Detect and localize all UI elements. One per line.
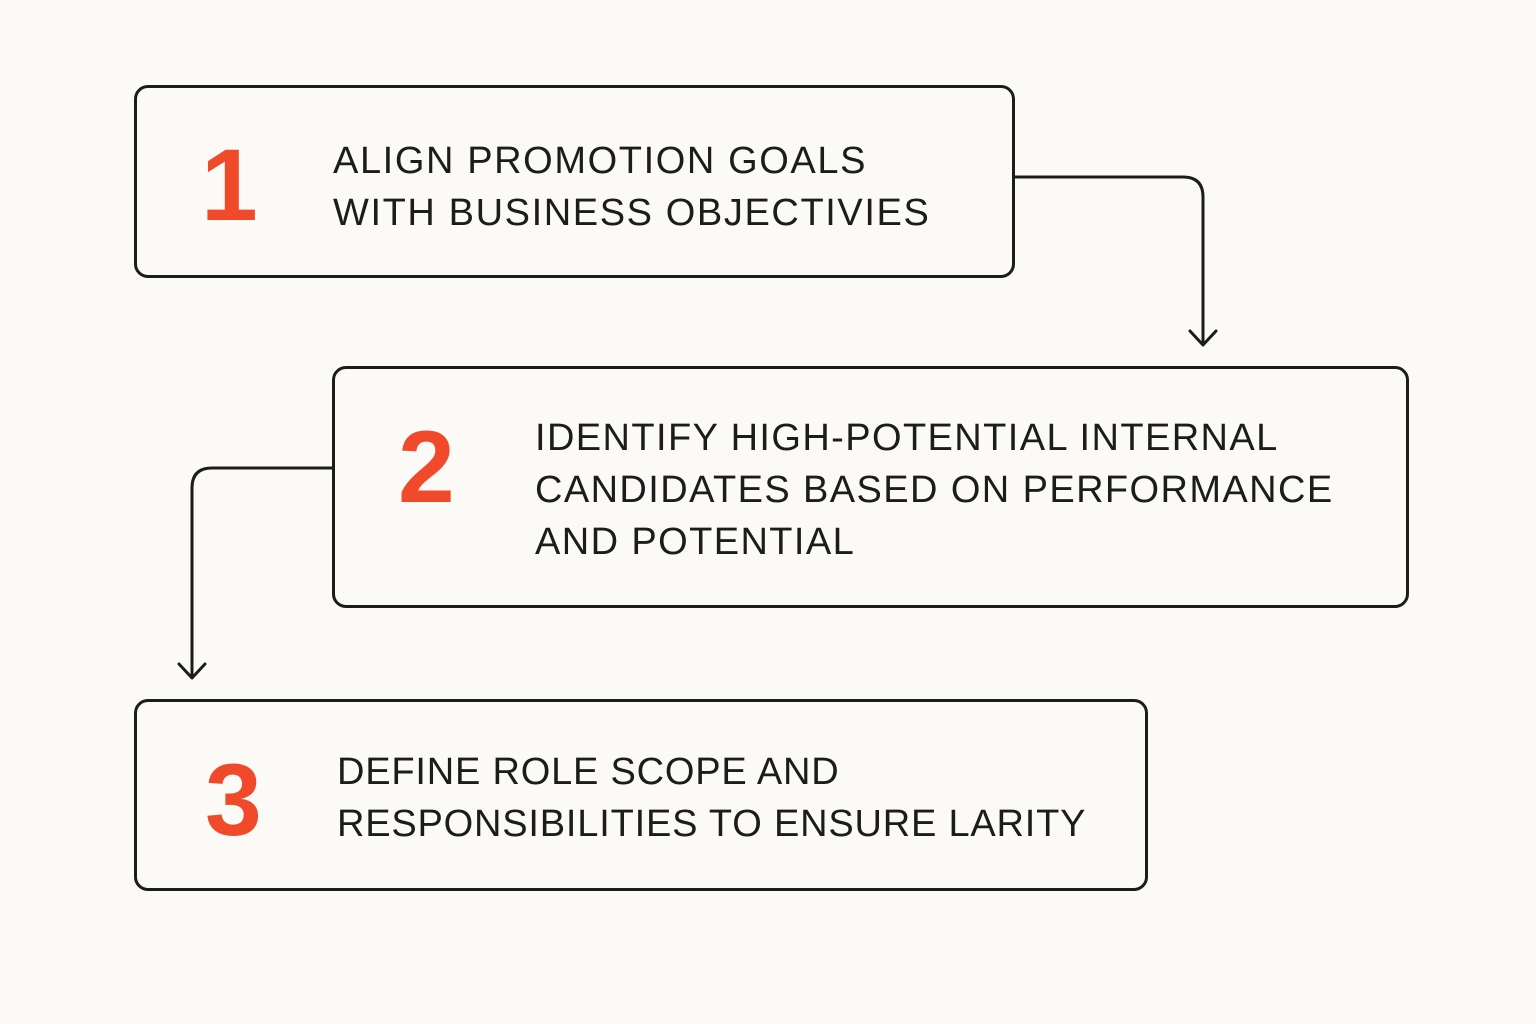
text: step 3: RESPONSIBILITIES TO ENSURE LARITY: [337, 803, 1086, 845]
text: step 3: DEFINE ROLE SCOPE AND: [337, 751, 839, 793]
text: step 1: ALIGN PROMOTION GOALS: [333, 140, 867, 182]
panel: step 2: [332, 366, 1409, 608]
panel: step 3: [134, 699, 1148, 891]
text: step 1: WITH BUSINESS OBJECTIVIES: [333, 192, 930, 234]
text: step 2: IDENTIFY HIGH-POTENTIAL INTERNAL: [535, 417, 1279, 459]
arrow: step 1 to step 2: [1015, 177, 1216, 345]
panel: step 1: [134, 85, 1015, 278]
number 1: 1: [201, 128, 258, 242]
text: step 2: CANDIDATES BASED ON PERFORMANCE: [535, 469, 1334, 511]
number 2: 2: [398, 410, 455, 524]
text: step 3: [337, 751, 1086, 845]
text: step 2: AND POTENTIAL: [535, 521, 855, 563]
text: step 1: [333, 140, 930, 234]
arrow: step 2 to step 3: [179, 468, 332, 678]
text: step 2: [535, 417, 1334, 563]
number 3: 3: [205, 743, 262, 857]
